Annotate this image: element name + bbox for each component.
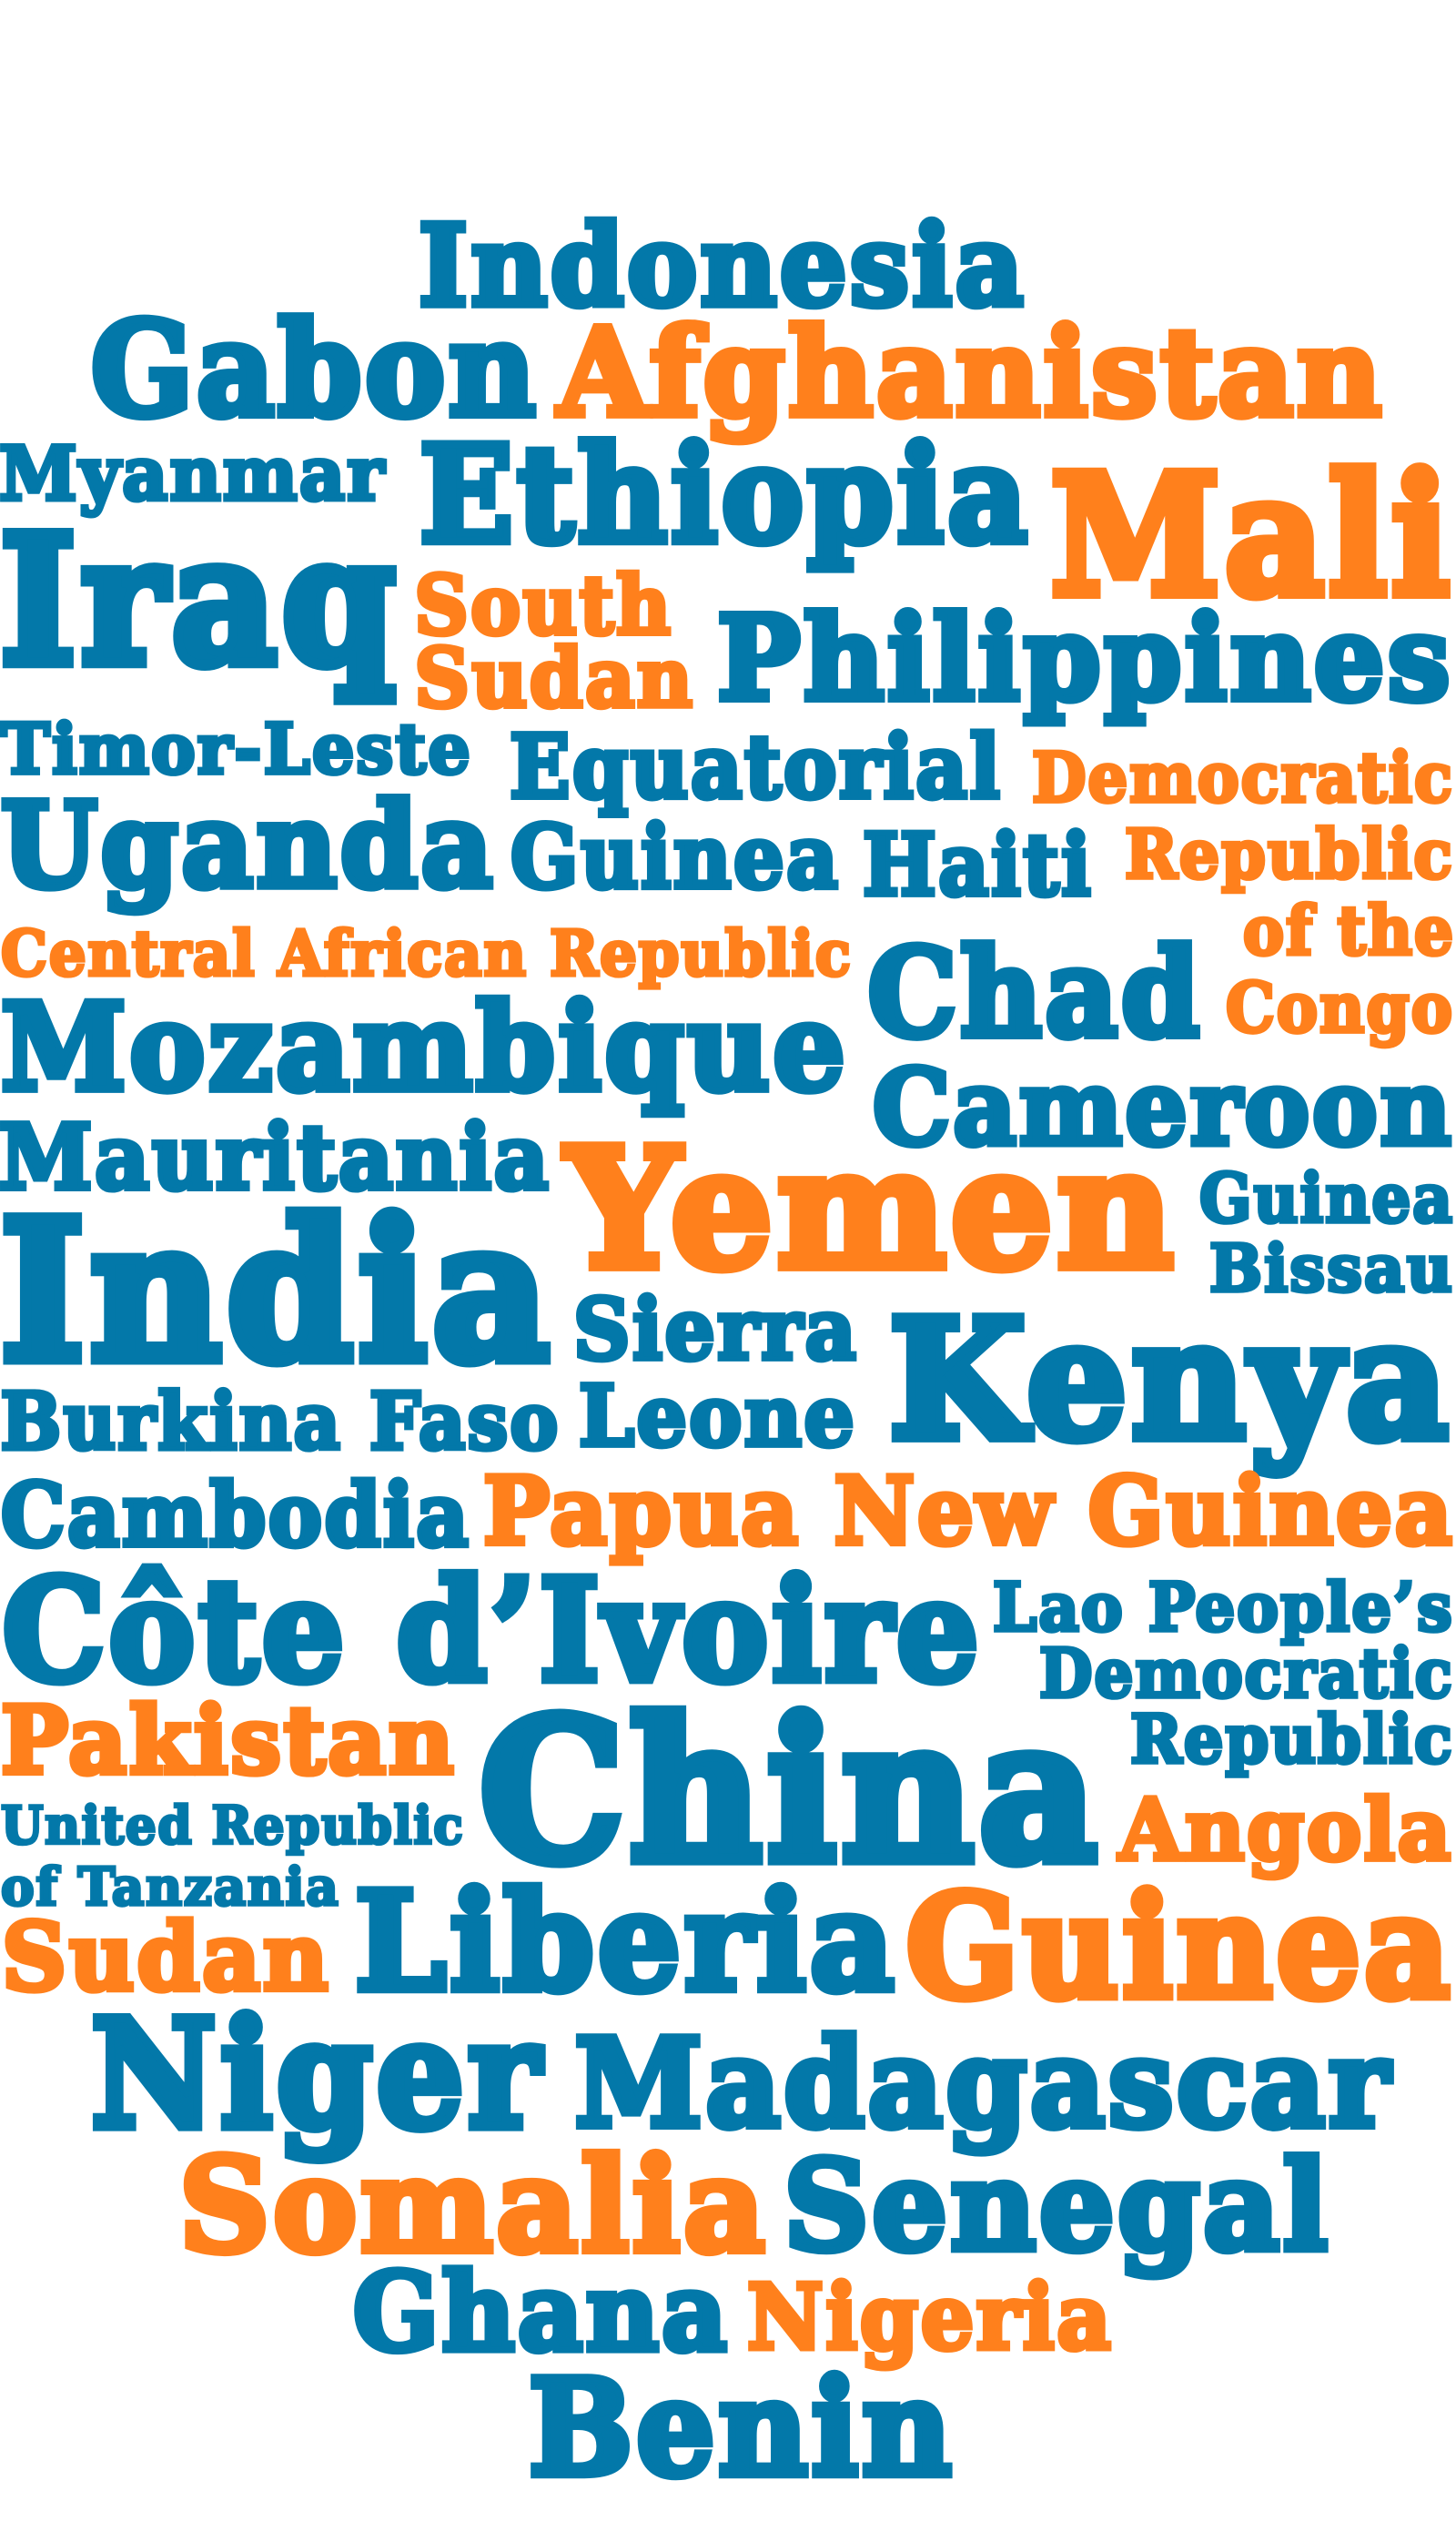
word: United Republic of Tanzania: of Tanzania (1, 1856, 339, 1918)
word: Guinea Bissau (1199, 1159, 1454, 1306)
word: Yemen: Yemen (564, 1112, 1178, 1305)
word: India: India (0, 1178, 555, 1404)
word: Equatorial Guinea (510, 717, 1002, 908)
word: South Sudan: South (414, 558, 672, 653)
word: Central African Republic: Central African Republic (1, 916, 853, 990)
word: Iraq: Iraq (0, 496, 400, 704)
word: Angola: Angola (1118, 1780, 1453, 1879)
word: United Republic of Tanzania (1, 1795, 464, 1918)
word: Ghana: Ghana (353, 2249, 730, 2375)
word: Madagascar: Madagascar (575, 2012, 1392, 2155)
word: Sierra Leone (573, 1280, 858, 1465)
word: Afghanistan: Afghanistan (556, 302, 1385, 444)
word: Côte d'Ivoire: Côte d’Ivoire (3, 1549, 983, 1714)
word: Uganda: Uganda (1, 777, 496, 915)
word: Mozambique: Mozambique (1, 977, 848, 1119)
word: Equatorial Guinea: Equatorial (510, 717, 1002, 818)
word: Gabon: Gabon (91, 293, 539, 446)
word: Democratic Republic of the Congo (1032, 737, 1455, 1048)
word: Sudan: Sudan (2, 1903, 331, 2012)
word: Ethiopia: Ethiopia (420, 417, 1031, 573)
word: Haiti: Haiti (863, 815, 1093, 916)
word: Sierra Leone: Sierra (573, 1280, 858, 1379)
word: Liberia: Liberia (355, 1863, 898, 2022)
word: Pakistan: Pakistan (1, 1686, 457, 1796)
word: Benin: Benin (529, 2352, 956, 2506)
word: Lao People's Democratic Republic (993, 1569, 1454, 1778)
word: Sierra Leone: Leone (579, 1367, 856, 1465)
word: Burkina Faso: Burkina Faso (0, 1376, 561, 1468)
word: Niger: Niger (91, 1986, 544, 2162)
word: Myanmar: Myanmar (0, 431, 386, 518)
word: Equatorial Guinea: Guinea (511, 807, 840, 908)
word: Timor-Leste: Timor-Leste (1, 708, 472, 789)
word: Chad: Chad (868, 922, 1203, 1065)
word: Indonesia: Indonesia (419, 200, 1026, 331)
word: Mauritania: Mauritania (0, 1106, 551, 1210)
word: Guinea Bissau: Bissau (1209, 1230, 1454, 1306)
word: South Sudan: Sudan (414, 631, 694, 725)
word: United Republic of Tanzania: United Republic (1, 1795, 464, 1857)
word: Somalia: Somalia (179, 2131, 768, 2282)
word: Cambodia: Cambodia (1, 1465, 470, 1566)
word: South Sudan (414, 558, 694, 725)
word: China: China (480, 1677, 1102, 1906)
word: Senegal: Senegal (784, 2133, 1331, 2278)
word: Nigeria: Nigeria (747, 2266, 1114, 2371)
